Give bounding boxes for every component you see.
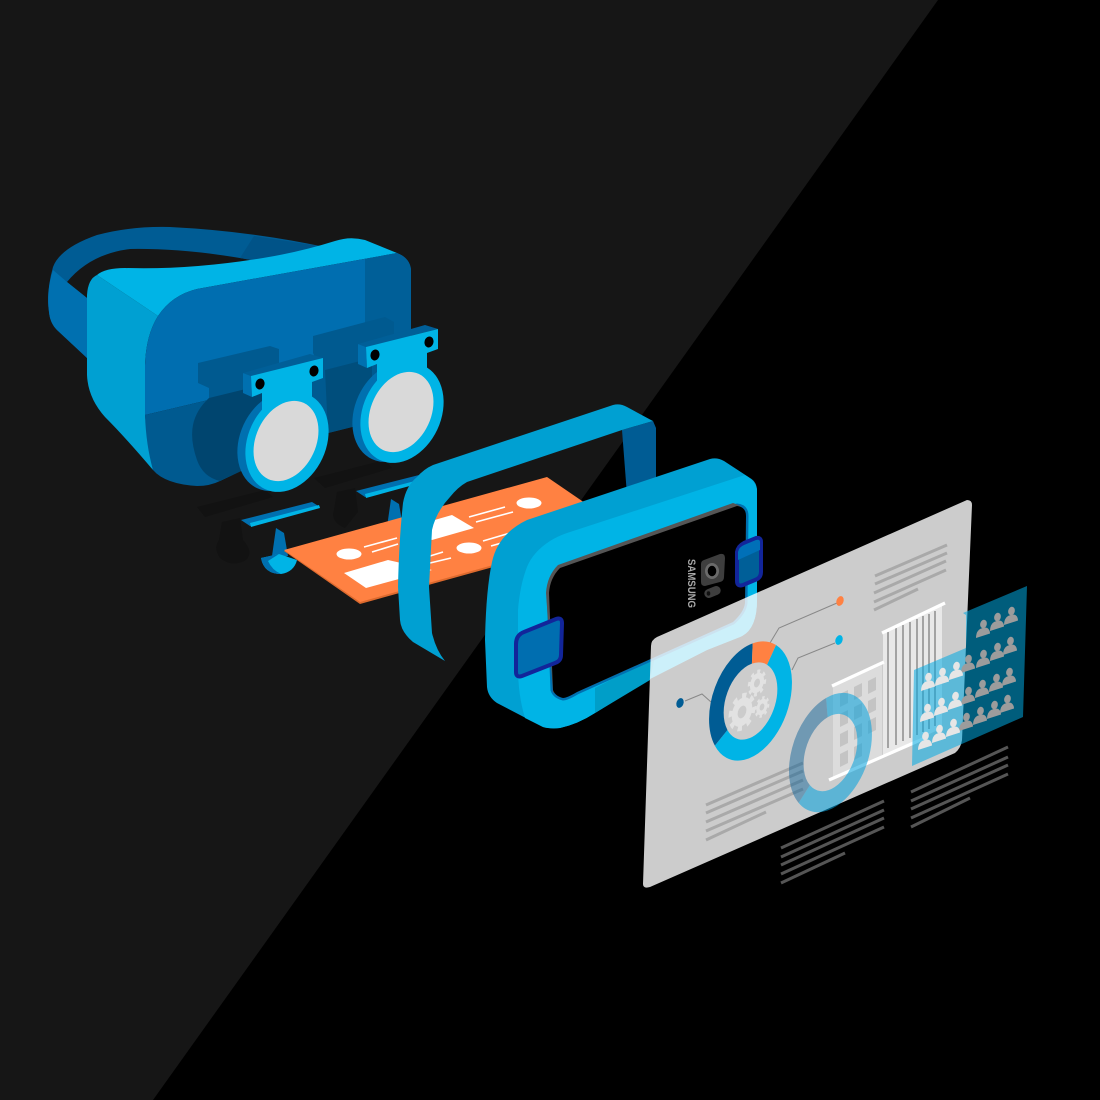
short building <box>833 665 882 777</box>
roofs and ground <box>829 603 945 780</box>
phone camera module <box>701 554 725 599</box>
card white shapes <box>336 498 542 588</box>
buildings <box>829 603 945 780</box>
lens rim side <box>337 348 451 476</box>
tab top <box>358 325 438 347</box>
tab holes <box>369 336 435 361</box>
donut chart <box>716 639 785 763</box>
tall building <box>883 605 942 756</box>
lens glass <box>241 390 331 492</box>
building windows <box>840 677 876 767</box>
left clip <box>516 618 562 676</box>
phone back <box>549 506 746 698</box>
tab holes <box>254 365 320 390</box>
phone edge <box>546 503 746 698</box>
lens rim side <box>222 377 336 505</box>
left small bar <box>241 502 320 527</box>
tab top <box>243 354 323 376</box>
audience overlay panel <box>912 586 1027 766</box>
right clip <box>737 538 761 586</box>
translucent screen panel <box>643 500 972 888</box>
left hook <box>261 528 297 574</box>
tab front <box>251 358 323 415</box>
frame lower shade <box>595 657 655 713</box>
headset shadows <box>197 460 392 564</box>
text block below panel centre <box>781 801 884 883</box>
body lower band <box>145 352 411 486</box>
frame outer side <box>485 458 757 728</box>
phone brand: SAMSUNG <box>685 559 697 608</box>
left lens cylinder <box>192 385 290 481</box>
tab side <box>243 373 252 397</box>
text block upper right <box>874 545 947 610</box>
rear frame band <box>398 404 656 661</box>
orange circuit card <box>284 477 623 604</box>
data dots <box>675 595 845 709</box>
right lens mount <box>313 317 394 433</box>
text block lower left <box>706 763 803 840</box>
phone holder frame <box>485 458 761 728</box>
icon: gears <box>730 668 768 733</box>
text block below panel right <box>911 747 1008 827</box>
leader lines <box>685 603 837 702</box>
audience people on dark <box>959 606 1018 731</box>
tall building stripes <box>888 611 935 748</box>
left lens <box>222 354 344 506</box>
tab side <box>358 344 367 368</box>
tab front <box>366 329 438 386</box>
translucent ring <box>796 691 865 814</box>
body right shaded area <box>365 253 411 363</box>
frame inner face <box>518 475 757 728</box>
body left face <box>87 275 158 470</box>
headset strap <box>48 227 325 358</box>
right small bar <box>356 473 435 498</box>
audience people on panel <box>918 661 963 750</box>
headset body <box>87 238 411 486</box>
left lens mount <box>192 346 300 481</box>
phone rim <box>549 506 746 698</box>
card lines <box>364 507 513 563</box>
right hook <box>387 499 403 529</box>
lens rim <box>230 378 344 506</box>
body top face <box>97 238 397 316</box>
lens rim <box>345 349 459 477</box>
lens glass <box>356 361 446 463</box>
right lens <box>337 325 459 477</box>
right lens cylinder <box>325 358 372 433</box>
body front face <box>145 253 411 415</box>
